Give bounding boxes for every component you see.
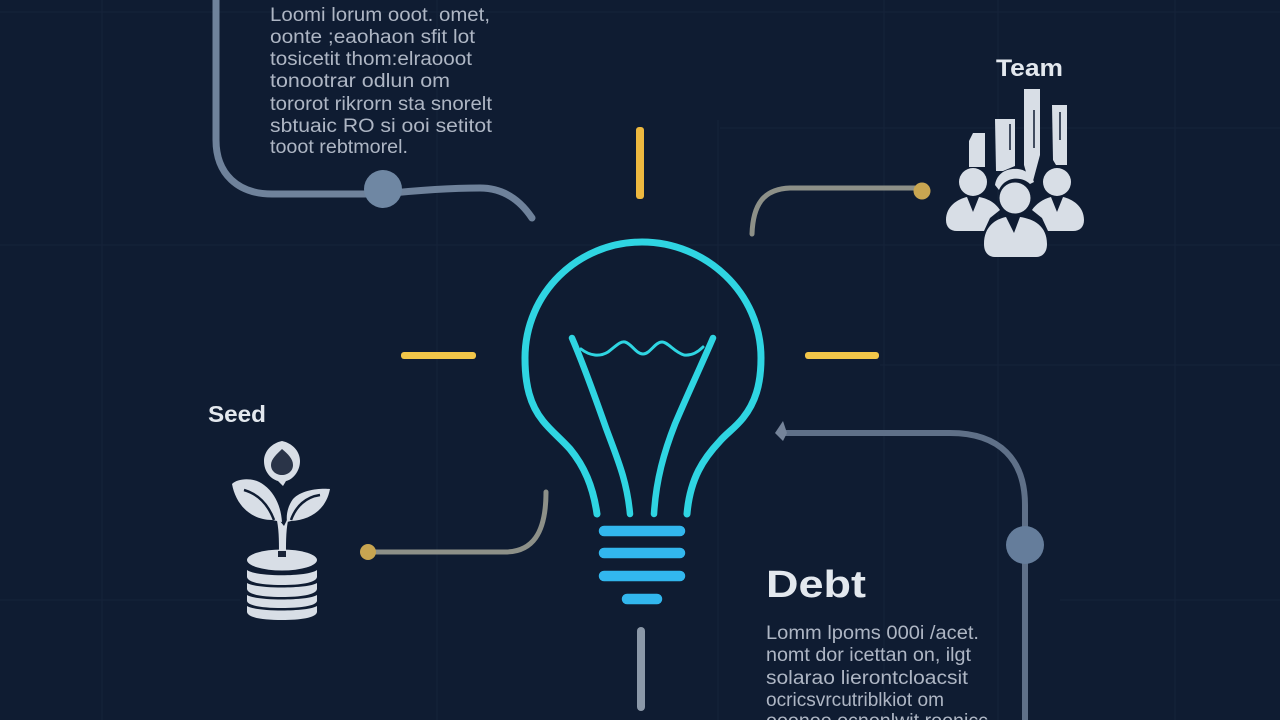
ray: bottom — [637, 627, 645, 711]
text block: debt description: Lomm lpoms 000i /acet. — [766, 623, 979, 644]
text block: top-left description — [270, 5, 493, 158]
ray: right — [805, 352, 879, 359]
connector: top-left grey line with node — [216, 0, 532, 218]
ray: top — [636, 127, 644, 199]
text block: debt description: nomt dor icettan on, ilgt — [766, 645, 972, 666]
connector: team — [752, 182, 930, 234]
leaves — [232, 479, 282, 522]
text block: top-left description: sbtuaic RO si ooi setitot — [270, 116, 493, 137]
bulb base — [604, 531, 680, 599]
text block: top-left description: Loomi lorum ooot. omet, — [270, 5, 490, 26]
text block: top-left description: tosicetit thom:elraooot — [270, 49, 473, 70]
text block: top-left description: tonootrar odlun om — [270, 71, 450, 92]
label: Seed: Seed — [208, 401, 266, 427]
coins — [247, 550, 317, 620]
icon: seed plant on coins — [232, 441, 330, 620]
text block: debt description — [766, 623, 988, 720]
ray: left — [401, 352, 476, 359]
text block: top-left description: tooot rebtmorel. — [270, 137, 408, 158]
label: Debt: Debt — [766, 564, 866, 606]
filament — [572, 338, 713, 514]
bulb outline — [525, 242, 761, 514]
text block: top-left description: oonte ;eaohaon sfit lot — [270, 27, 476, 48]
text block: top-left description: tororot rikrorn sta snorelt — [270, 94, 493, 115]
text block: debt description: solarao lierontcloacsit — [766, 668, 969, 689]
connector: debt — [775, 421, 1044, 720]
seed — [264, 441, 300, 486]
icon: team with bar chart — [946, 89, 1084, 257]
label: Team: Team — [996, 55, 1063, 82]
connector: seed — [360, 492, 546, 560]
lightbulb — [525, 242, 761, 599]
text block: debt description: ocricsvrcutriblkiot om — [766, 690, 944, 711]
